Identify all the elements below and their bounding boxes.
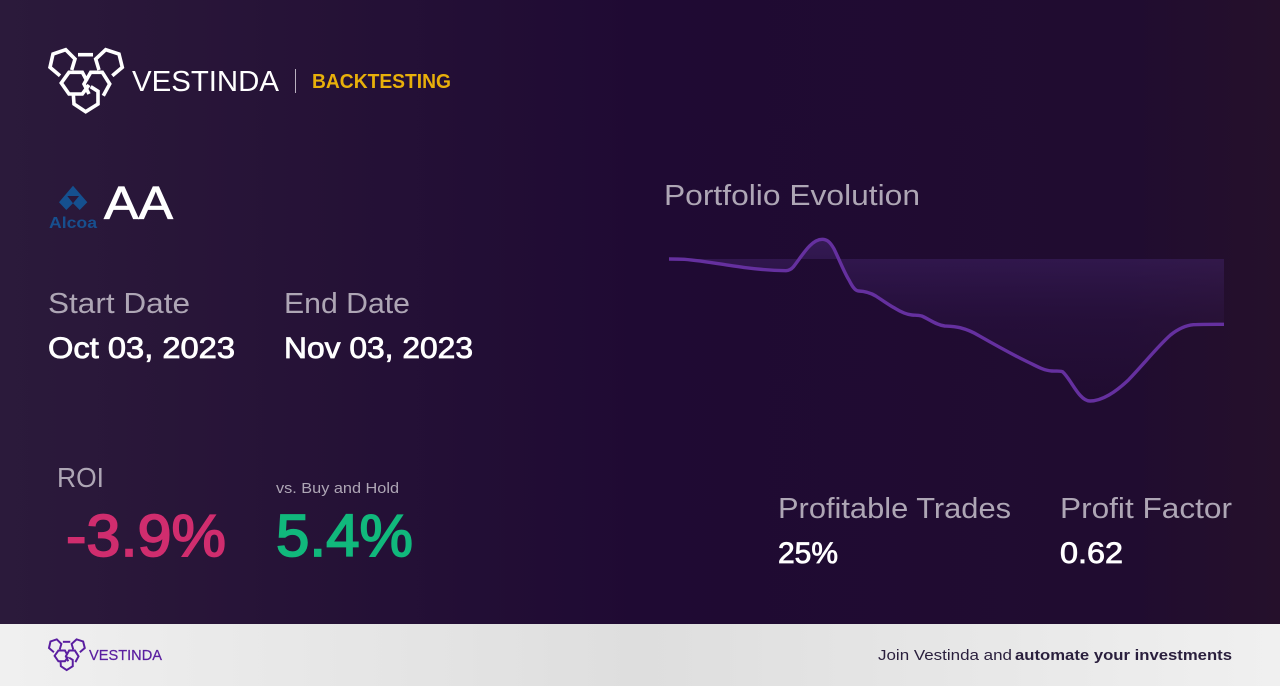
heading: Portfolio Evolution: [664, 180, 920, 212]
header logo: [50, 50, 451, 112]
ticker: AA: [104, 177, 173, 229]
ROI value: ROI: [57, 462, 104, 493]
dates: [48, 288, 473, 365]
icon: Alcoa logo: Alcoa: [49, 215, 97, 232]
profit factor: [1060, 493, 1232, 570]
vs buy and hold value: vs. Buy and Hold: [276, 480, 399, 497]
ROI value: -3.9%: [66, 503, 226, 569]
line chart: [669, 239, 1224, 401]
end date: End Date: [284, 288, 410, 320]
ROI value: [57, 462, 226, 569]
start date: Oct 03, 2023: [48, 332, 235, 365]
end date: [284, 288, 473, 365]
start date: [48, 288, 235, 365]
profit factor: 0.62: [1060, 537, 1123, 570]
ROI block: [57, 462, 413, 569]
stats: [778, 493, 1232, 570]
end date: Nov 03, 2023: [284, 332, 473, 365]
footer call to action: automate your investments: [1015, 647, 1232, 664]
profit factor: Profit Factor: [1060, 493, 1232, 525]
footer logo icon: [49, 639, 85, 670]
panel: portfolio evolution: [664, 180, 1224, 401]
profitable trades: Profitable Trades: [778, 493, 1011, 525]
ticker block: [49, 177, 173, 232]
wordmark: VESTINDA: [132, 66, 280, 98]
icon: Vestinda hexagons: [50, 50, 122, 112]
start date: Start Date: [48, 288, 190, 320]
footer wordmark: VESTINDA: [89, 647, 162, 664]
footer call to action: Join Vestinda and: [878, 647, 1012, 664]
label: backtesting: BACKTESTING: [312, 71, 451, 93]
footer: [0, 624, 1280, 686]
profitable trades: [778, 493, 1011, 570]
vs buy and hold value: 5.4%: [276, 503, 413, 569]
profitable trades: 25%: [778, 537, 838, 570]
footer call to action: [878, 647, 1232, 664]
